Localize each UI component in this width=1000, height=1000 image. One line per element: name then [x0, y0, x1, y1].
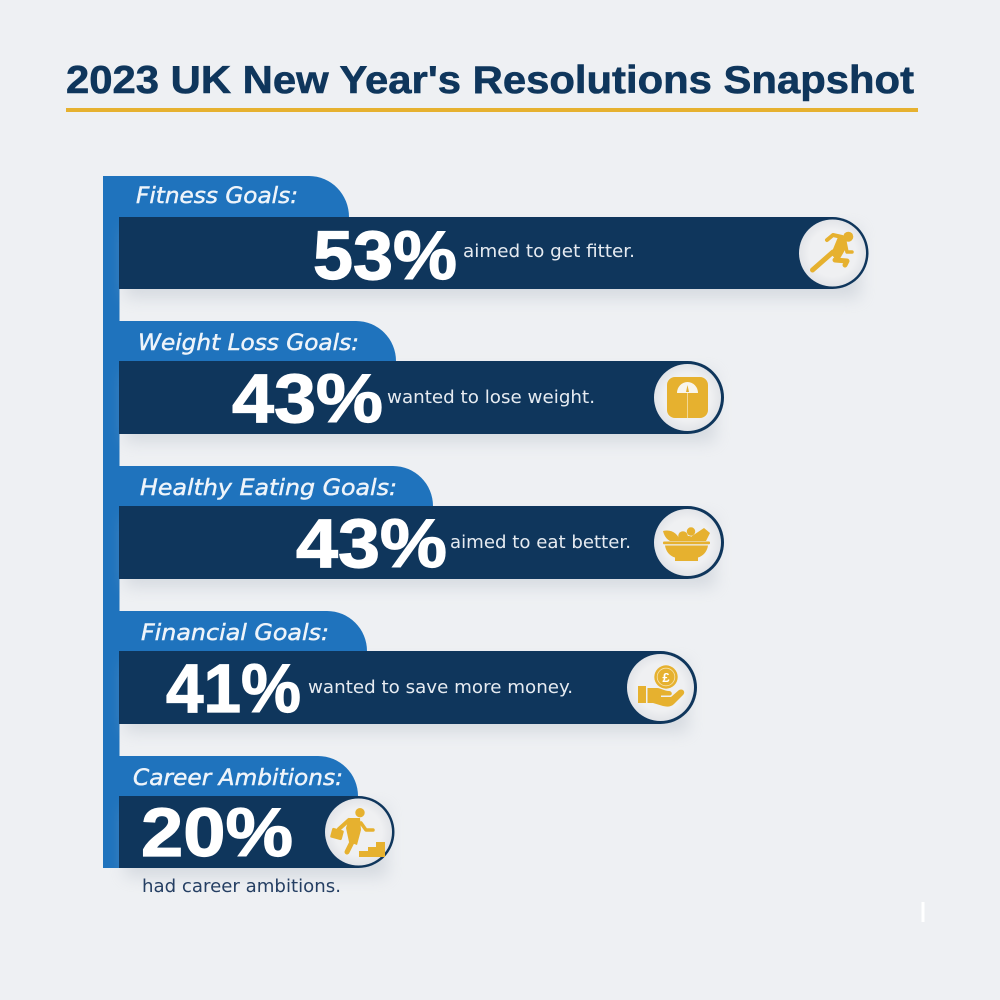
title: 2023 UK New Year's Resolutions Snapshot	[66, 59, 914, 102]
icon: hand holding pound coin	[638, 665, 684, 707]
tab: healthy eating goals	[119, 466, 433, 506]
text: wanted to lose weight: wanted to lose weight.	[387, 388, 595, 408]
heading: fitness goals: Fitness Goals:	[136, 184, 298, 209]
bar: career ambitions	[119, 796, 394, 868]
text: aimed to eat better: aimed to eat better.	[450, 533, 631, 553]
icon: fruit bowl	[663, 527, 710, 561]
tab: financial goals	[119, 611, 367, 651]
panel: weight loss goals	[119, 321, 724, 442]
title underline	[66, 108, 918, 112]
tab: career ambitions	[119, 756, 358, 796]
bar: fitness goals	[119, 217, 868, 289]
heading: career ambitions: Career Ambitions:	[133, 766, 343, 791]
panel: career ambitions	[119, 756, 394, 877]
bar: healthy eating goals	[119, 506, 724, 579]
panel: financial goals	[119, 611, 697, 732]
bar: weight loss goals	[119, 361, 724, 434]
heading: healthy eating goals: Healthy Eating Goals:	[140, 476, 397, 501]
tab: fitness goals	[103, 176, 349, 217]
value: 43%: 43%	[232, 360, 383, 437]
value: 20%: 20%	[141, 794, 293, 871]
value: 43%: 43%	[296, 505, 447, 582]
tab: weight loss goals	[119, 321, 396, 361]
vertical axis bar	[103, 176, 120, 868]
small white tick mark	[922, 902, 924, 922]
value: 41%: 41%	[166, 650, 301, 727]
icon: runner	[812, 232, 853, 270]
icon circle: eating	[654, 509, 721, 576]
icon circle: weight	[654, 364, 721, 431]
text: had career ambitions: had career ambitions.	[142, 877, 341, 897]
icon circle: financial	[627, 654, 694, 721]
icon circle: fitness	[799, 220, 866, 286]
text: aimed to get fitter: aimed to get fitter.	[463, 242, 635, 262]
icon: bathroom scale	[667, 377, 708, 418]
icon circle: career	[325, 798, 392, 866]
panel: fitness goals	[103, 176, 868, 298]
heading: financial goals: Financial Goals:	[141, 621, 329, 646]
value: 53%: 53%	[313, 217, 457, 294]
icon: hand holding pound coin: £	[662, 670, 670, 685]
icon: businessman climbing stairs	[330, 808, 385, 857]
panel: healthy eating goals	[119, 466, 724, 587]
bar: financial goals	[119, 651, 697, 724]
heading: weight loss goals: Weight Loss Goals:	[138, 331, 359, 356]
text: wanted to save more money: wanted to save more money.	[308, 678, 573, 698]
